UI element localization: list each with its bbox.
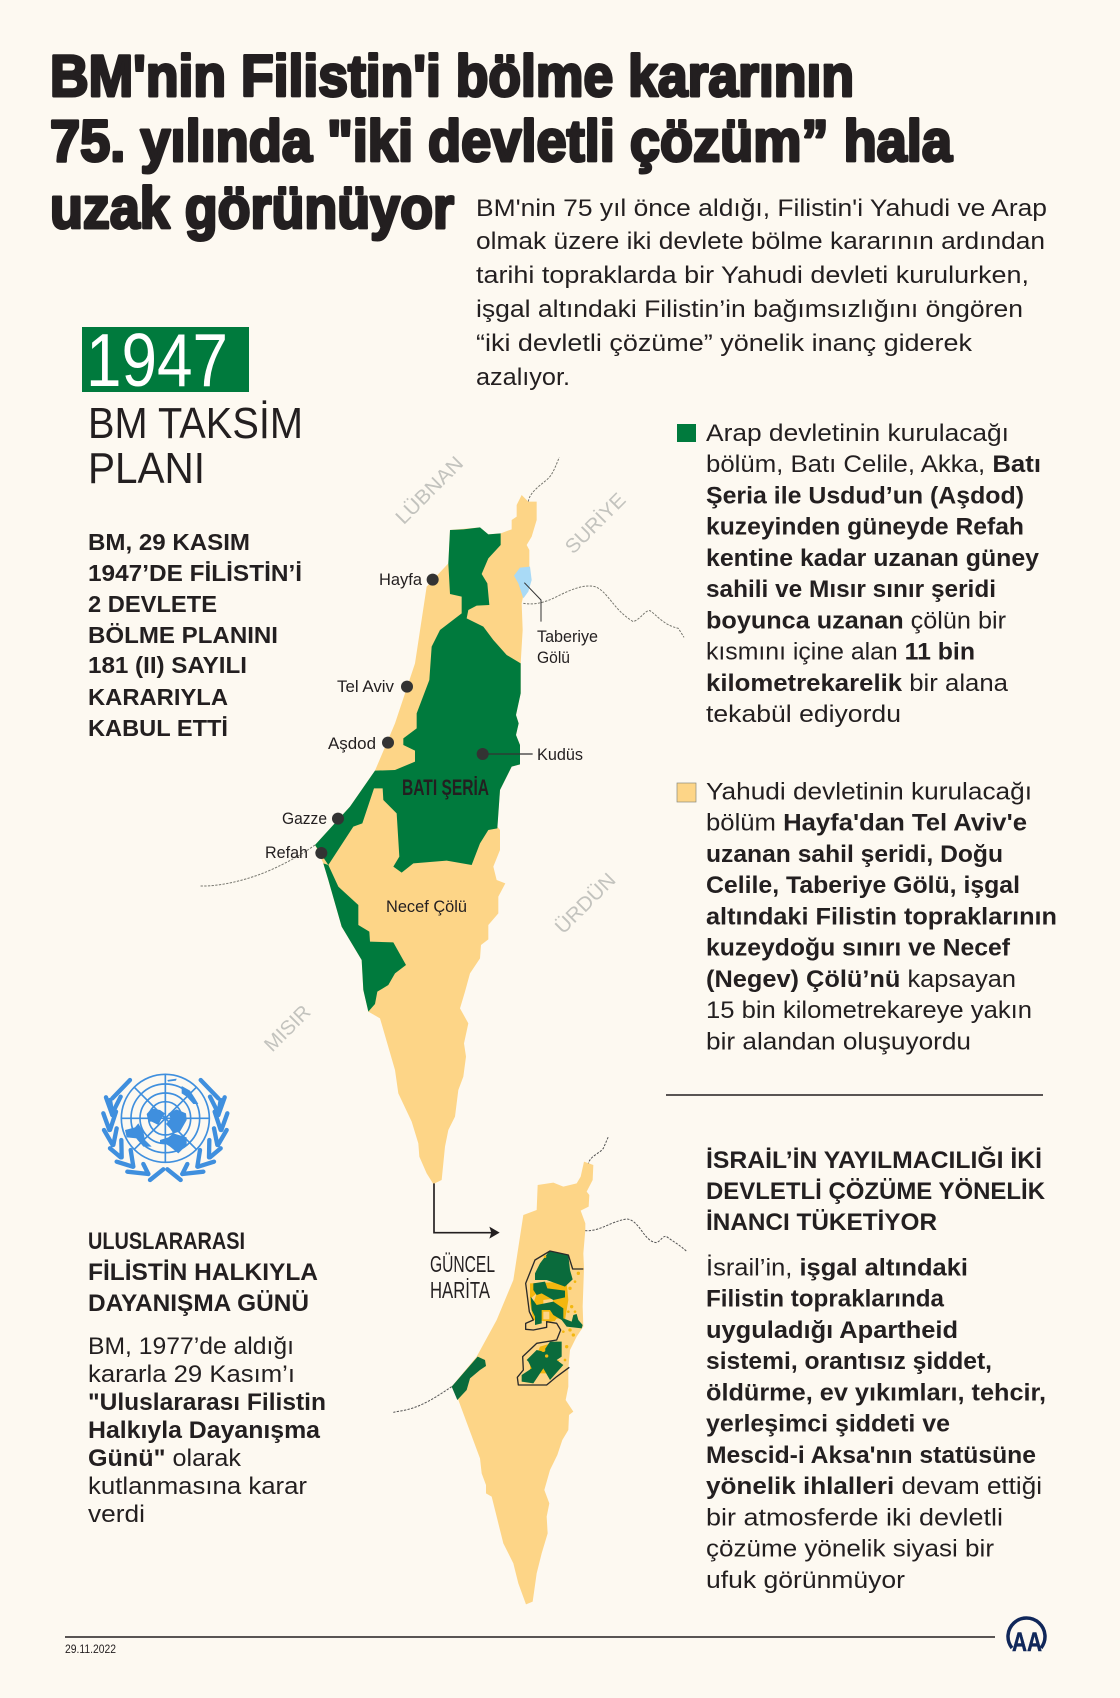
legend: Arab state: Arap devletinin kurulacağı <box>706 420 1009 447</box>
text block: Israeli expansion: yönelik ihlalleri devam ettiği <box>706 1473 1042 1500</box>
text block: partition decision: BÖLME PLANINI <box>88 622 278 648</box>
legend: Arab state: kısmını içine alan 11 bin <box>706 639 975 666</box>
country labels: ÜRDÜN <box>551 869 620 938</box>
text block: Israeli expansion: bir atmosferde iki devletli <box>706 1504 1003 1532</box>
text block: Solidarity day <box>88 1333 326 1528</box>
intro text: azalıyor. <box>476 364 570 391</box>
legend: Arab state: sahili ve Mısır sınır şeridi <box>706 576 996 603</box>
heading: Israeli expansion: İNANCI TÜKETİYOR <box>706 1209 937 1236</box>
text block: Israeli expansion: çözüme yönelik siyasi bir <box>706 1536 994 1563</box>
text block: Israeli expansion <box>706 1254 1046 1594</box>
map labels: Gazze <box>282 809 327 828</box>
legend: Arab state: kuzeyinden güneyde Refah <box>706 514 1024 541</box>
intro text: işgal altındaki Filistin’in bağımsızlığını öngören <box>476 296 1023 323</box>
legend: Arab state: tekabül ediyordu <box>706 701 901 728</box>
legend: Jewish state: (Negev) Çölü’nü kapsayan <box>706 966 1016 993</box>
date: 29.11.2022 <box>65 1642 116 1656</box>
heading: BM Taksim Plani <box>88 399 303 493</box>
legend: Jewish state: 15 bin kilometrekareye yakın <box>706 997 1032 1024</box>
country labels: MISIR <box>260 1001 315 1056</box>
intro text <box>476 195 1047 391</box>
heading: Solidarity day: ULUSLARARASI <box>88 1228 245 1255</box>
logo: AA <box>1008 1618 1045 1657</box>
legend: Jewish state: uzanan sahil şeridi, Doğu <box>706 841 1003 868</box>
text block: Solidarity day: kutlanmasına karar <box>88 1473 307 1500</box>
text block: Solidarity day: verdi <box>88 1501 145 1528</box>
Gaza <box>452 1357 486 1400</box>
text block: partition decision: 1947’DE FİLİSTİN’İ <box>88 560 302 586</box>
text block: partition decision <box>88 529 302 741</box>
intro text: BM'nin 75 yıl önce aldığı, Filistin'i Yahudi ve Arap <box>476 195 1047 222</box>
text block: Israeli expansion: uyguladığı Apartheid <box>706 1317 958 1344</box>
West Bank enclaves <box>517 1251 583 1385</box>
text block: partition decision: KARARIYLA <box>88 684 228 710</box>
heading: Israeli expansion: İSRAİL’İN YAYILMACILIĞI İKİ <box>706 1146 1042 1174</box>
map labels: Kudüs <box>537 745 583 764</box>
legend: Arab state <box>677 420 1041 728</box>
text block: Israeli expansion: İsrail’in, işgal altındaki <box>706 1254 968 1282</box>
map labels: Taberiye <box>537 627 598 646</box>
title: uzak görünüyor <box>50 176 454 241</box>
map labels: Necef Çölü <box>386 897 467 916</box>
title: 75. yılında "iki devletli çözüm” hala <box>50 109 953 174</box>
map labels: Hayfa <box>379 570 423 589</box>
text block: Solidarity day: Günü" olarak <box>88 1445 242 1472</box>
region: Arab state south <box>323 863 406 1012</box>
footer line <box>65 1636 995 1638</box>
region: Jewish state area <box>315 495 537 1184</box>
legend: Jewish state: Celile, Taberiye Gölü, işgal <box>706 872 1020 899</box>
logo: AA: AA <box>1012 1627 1042 1657</box>
text block: Solidarity day: BM, 1977’de aldığı <box>88 1333 294 1360</box>
text block: Israeli expansion: yerleşimci şiddeti ve <box>706 1411 950 1438</box>
legend: Arab state: kilometrekarelik bir alana <box>706 670 1008 697</box>
heading: Solidarity day: FİLİSTİN HALKIYLA <box>88 1259 318 1286</box>
heading: BM Taksim Plani: BM TAKSİM <box>88 399 303 448</box>
arrow to current map <box>434 1183 500 1239</box>
region: Arab state north and West Bank <box>315 527 521 873</box>
legend: Arab state: Şeria ile Usdud’un (Aşdod) <box>706 482 1024 510</box>
legend: Jewish state: kuzeydoğu sınırı ve Necef <box>706 935 1011 962</box>
text block: Israeli expansion: Mescid-i Aksa'nın statüsüne <box>706 1442 1036 1469</box>
legend: Jewish state <box>677 778 1057 1056</box>
country labels: SURİYE <box>560 488 630 558</box>
map labels: Refah <box>265 843 308 862</box>
intro text: olmak üzere iki devlete bölme kararının ardından <box>476 228 1045 255</box>
map labels: Aşdod <box>328 734 376 753</box>
heading: Solidarity day <box>88 1228 318 1317</box>
label: current map: HARİTA <box>430 1277 490 1303</box>
legend: Arab state: kentine kadar uzanan güney <box>706 545 1039 572</box>
text block: Israeli expansion: ufuk görünmüyor <box>706 1567 905 1594</box>
heading: BM Taksim Plani: PLANI <box>88 444 205 493</box>
text block: Solidarity day: Halkıyla Dayanışma <box>88 1417 320 1444</box>
label: current map <box>430 1251 495 1303</box>
map: current <box>393 1137 687 1604</box>
year badge 1947: 1947 <box>86 318 228 402</box>
country labels: LÜBNAN <box>392 453 468 529</box>
country labels <box>260 453 630 1056</box>
legend: Arab state: bölüm, Batı Celile, Akka, Batı <box>706 451 1041 478</box>
map labels <box>265 570 598 916</box>
legend: Jewish state: Yahudi devletinin kurulacağı <box>706 778 1032 806</box>
text block: partition decision: 2 DEVLETE <box>88 591 217 617</box>
map labels: Gölü <box>537 648 570 667</box>
text block: partition decision: 181 (II) SAYILI <box>88 652 247 678</box>
heading: Solidarity day: DAYANIŞMA GÜNÜ <box>88 1290 309 1317</box>
legend: Jewish state: altındaki Filistin topraklarının <box>706 904 1057 930</box>
intro text: tarihi topraklarda bir Yahudi devleti kurulurken, <box>476 262 1029 289</box>
text block: Israeli expansion: öldürme, ev yıkımları, tehcir, <box>706 1380 1046 1406</box>
legend: Jewish state: bir alandan oluşuyordu <box>706 1028 971 1056</box>
heading: Israeli expansion: DEVLETLİ ÇÖZÜME YÖNELİK <box>706 1178 1045 1205</box>
text block: Israeli expansion: Filistin topraklarında <box>706 1286 944 1313</box>
map: 1947 partition plan <box>200 457 684 1184</box>
intro text: “iki devletli çözüme” yönelik inanç giderek <box>476 330 973 357</box>
map labels: BATI ŞERİA <box>402 775 489 800</box>
title: BM'nin Filistin'i bölme kararının <box>50 44 854 109</box>
map labels: Tel Aviv <box>337 677 394 696</box>
text block: Solidarity day: "Uluslararası Filistin <box>88 1389 326 1416</box>
heading: Israeli expansion <box>706 1146 1045 1236</box>
icon: UN emblem <box>103 1074 227 1180</box>
lake: Taberiye <box>514 567 532 598</box>
text block: Israeli expansion: sistemi, orantısız şiddet, <box>706 1348 992 1375</box>
text block: partition decision: BM, 29 KASIM <box>88 529 250 555</box>
text block: partition decision: KABUL ETTİ <box>88 715 228 741</box>
title <box>50 44 953 241</box>
text block: Solidarity day: kararla 29 Kasım’ı <box>88 1361 295 1388</box>
legend: Jewish state: bölüm Hayfa'dan Tel Aviv'e <box>706 810 1027 837</box>
label: current map: GÜNCEL <box>430 1251 495 1277</box>
land outline <box>452 1162 593 1604</box>
legend: Arab state: boyunca uzanan çölün bir <box>706 608 1006 634</box>
